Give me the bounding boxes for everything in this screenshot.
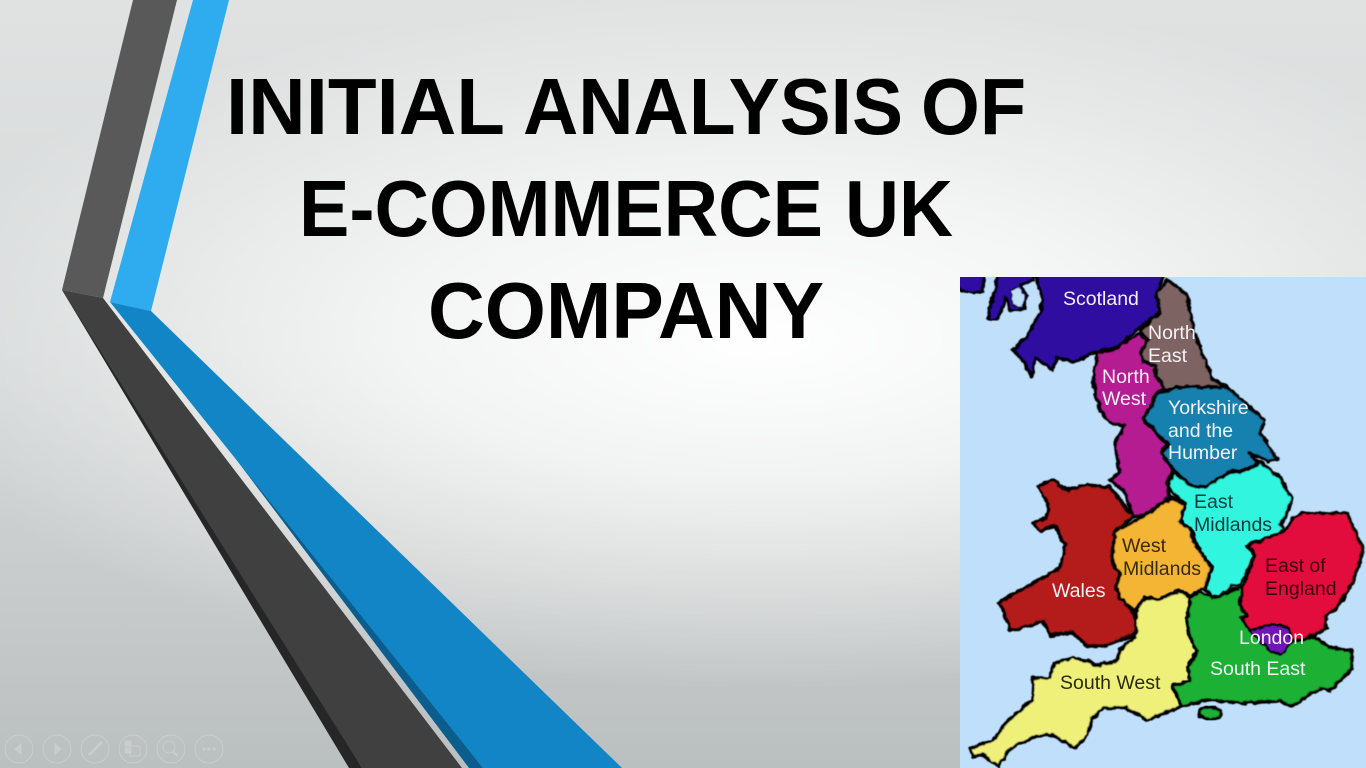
region: Scotland	[960, 277, 1166, 380]
region: Yorkshire and the Humber: and the	[1168, 420, 1233, 442]
region: Yorkshire and the Humber	[1143, 387, 1278, 487]
region: North West: North	[1102, 366, 1150, 388]
button: next	[43, 735, 71, 763]
region: South East	[1173, 586, 1352, 719]
title: UK	[845, 164, 953, 253]
button: more	[195, 735, 223, 763]
button: previous	[5, 735, 33, 763]
button: slides	[119, 735, 147, 763]
region: Wales	[998, 480, 1137, 646]
button: pen	[81, 735, 109, 763]
region: East of England: England	[1265, 578, 1337, 600]
button: zoom	[157, 735, 185, 763]
region: West Midlands: West	[1122, 535, 1167, 557]
region: West Midlands: Midlands	[1123, 558, 1201, 580]
title: INITIAL	[226, 62, 505, 151]
title: COMPANY	[428, 266, 824, 355]
region: South West: South West	[1060, 672, 1161, 694]
region: South West	[970, 590, 1197, 766]
region: East Midlands	[1168, 462, 1292, 598]
region: East of England: East of	[1265, 555, 1326, 577]
title: E-COMMERCE	[299, 164, 823, 253]
region: Yorkshire and the Humber: Yorkshire	[1168, 397, 1249, 419]
region: Yorkshire and the Humber: Humber	[1168, 442, 1238, 464]
region: Wales: Wales	[1052, 580, 1106, 602]
title: ANALYSIS	[523, 62, 903, 151]
slideshow controls	[5, 735, 223, 763]
region: East Midlands: Midlands	[1194, 514, 1272, 536]
region: South East: South East	[1210, 658, 1306, 680]
region: North West	[1093, 333, 1173, 517]
region: North East: North	[1148, 322, 1196, 344]
region: London: London	[1239, 627, 1304, 649]
region: West Midlands	[1112, 497, 1212, 611]
region: East Midlands: East	[1194, 491, 1234, 513]
map of UK regions	[950, 265, 1366, 768]
title: OF	[921, 62, 1026, 151]
region: East of England	[1240, 513, 1363, 641]
region: North West: West	[1102, 388, 1147, 410]
region: North East: East	[1148, 345, 1188, 367]
decorative chevrons	[62, 0, 622, 768]
region: North East	[1140, 280, 1227, 390]
region: Scotland: Scotland	[1063, 288, 1139, 310]
title	[226, 62, 1026, 355]
